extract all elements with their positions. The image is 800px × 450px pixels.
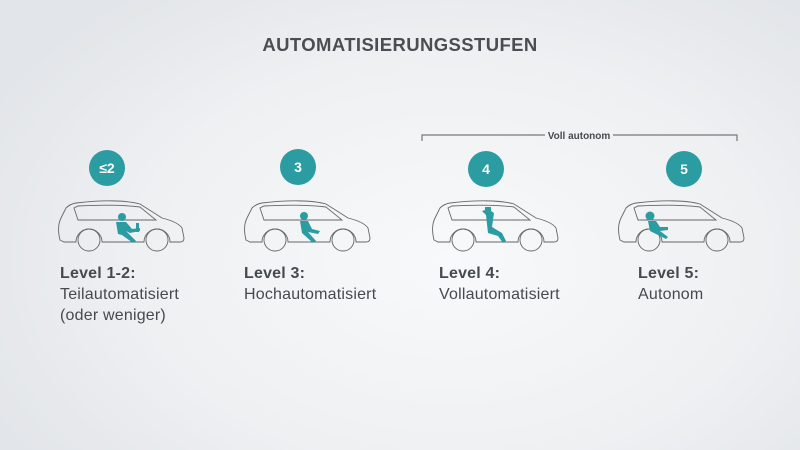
bracket: voll autonom: [421, 131, 738, 142]
circle: level 5: [666, 151, 702, 187]
label level 3: Hochautomatisiert: [244, 286, 376, 303]
circle: level 4: [468, 151, 504, 187]
label level 5: Autonom: [638, 286, 703, 303]
car 4: [618, 200, 744, 252]
circle: level ≤2: ≤2: [99, 160, 115, 176]
circle: level 4: 4: [482, 161, 490, 177]
label level 5: Level 5:: [638, 265, 699, 282]
title: AUTOMATISIERUNGSSTUFEN: [262, 34, 538, 55]
label level 1-2: Level 1-2:: [60, 265, 136, 282]
car 2: [244, 200, 370, 252]
label level 1-2: [60, 265, 179, 324]
circle: level ≤2: [89, 150, 125, 186]
circle: level 3: 3: [294, 159, 302, 175]
label level 3: [244, 265, 376, 303]
label level 4: Level 4:: [439, 265, 500, 282]
label level 1-2: (oder weniger): [60, 307, 166, 324]
car 1: [58, 200, 184, 252]
label level 5: [638, 265, 703, 303]
car 3: [432, 200, 558, 252]
circle: level 3: [280, 149, 316, 185]
label level 3: Level 3:: [244, 265, 305, 282]
label level 1-2: Teilautomatisiert: [60, 286, 179, 303]
bracket: voll autonom: Voll autonom: [548, 131, 610, 142]
circle: level 5: 5: [680, 161, 688, 177]
label level 4: [439, 265, 560, 303]
label level 4: Vollautomatisiert: [439, 286, 560, 303]
